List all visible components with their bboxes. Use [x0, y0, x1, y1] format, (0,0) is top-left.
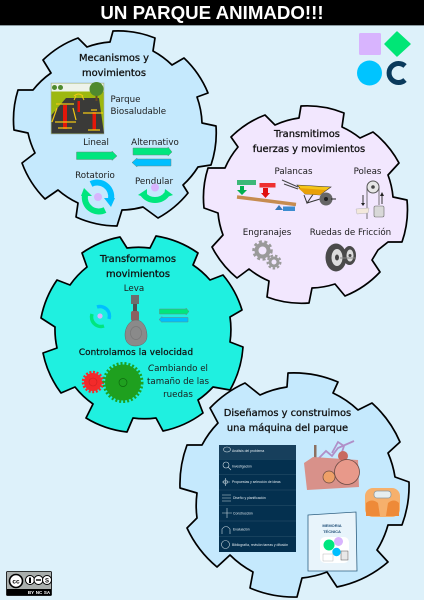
image: parque biosaludable [51, 82, 104, 134]
label: alternativo: Alternativo [131, 138, 179, 148]
text: cambiando el tamano: Cambiando el [148, 364, 208, 374]
panel: fases del proyecto [219, 445, 296, 552]
badge: creative commons: BY [28, 590, 34, 595]
badge: creative commons: cc [12, 578, 20, 586]
arrow: lineal [76, 151, 117, 160]
icon: guantes y gafas [365, 488, 400, 517]
icon: carretilla [282, 180, 336, 206]
arrow: izquierda [159, 316, 188, 322]
title [0, 0, 424, 26]
icon: leva [125, 295, 147, 346]
badge: creative commons [6, 572, 52, 596]
label: leva: Leva [124, 284, 144, 294]
heading: mecanismos: movimientos [82, 68, 146, 79]
label: parque biosaludable: Parque [110, 95, 140, 105]
badge: creative commons: SA [44, 590, 51, 595]
panel: fases del proyecto: Evaluación [233, 528, 250, 532]
logo: shapes [357, 32, 410, 86]
panel: fases del proyecto: Investigación [232, 464, 252, 468]
heading: transformamos: Transformamos [100, 254, 176, 265]
icon: engranaje verde [104, 364, 142, 402]
text: cambiando el tamano: tamaño de las [147, 377, 209, 387]
panel: memoria tecnica: TÉCNICA [323, 529, 341, 534]
label: ruedas de friccion: Ruedas de Fricción [310, 227, 391, 238]
heading: mecanismos: Mecanismos y [79, 53, 149, 64]
icon: pendular [138, 184, 173, 200]
panel: fases del proyecto: Construcción [233, 512, 253, 516]
heading: disenamos: una máquina del parque [227, 422, 348, 434]
icon: rotatorio pequeno [92, 307, 109, 326]
panel: fases del proyecto: Análisis del problema [232, 449, 264, 453]
icon: rotatorio [81, 183, 115, 211]
label: parque biosaludable: Biosaludable [110, 107, 166, 117]
panel: fases del proyecto: Diseño y planificación [233, 496, 266, 500]
arrow: alternativo derecha [133, 147, 172, 156]
badge: creative commons: NC [36, 590, 43, 595]
icon: ruedas de friccion [326, 244, 356, 272]
icon: polea [356, 181, 384, 219]
arrow: derecha [160, 308, 189, 315]
panel: memoria tecnica [308, 512, 357, 571]
icon: palanca [237, 180, 296, 211]
panel: mecanismos y movimientos [13, 31, 216, 226]
panel: transmitimos fuerzas y movimientos [203, 106, 407, 303]
label: lineal: Lineal [83, 138, 109, 148]
label: palancas: Palancas [274, 167, 313, 177]
panel: transformamos movimientos [41, 236, 243, 432]
panel: fases del proyecto: Bibliografía, revisión tareas y difusión [232, 543, 288, 547]
title: UN PARQUE ANIMADO!!! [100, 2, 324, 23]
label: pendular: Pendular [135, 177, 173, 187]
heading: transmitimos: fuerzas y movimientos [253, 144, 365, 155]
label: poleas: Poleas [354, 167, 382, 177]
image: maquina [304, 441, 360, 490]
icon: engranajes [254, 242, 280, 268]
panel: disenamos y construimos [180, 373, 409, 597]
label: engranajes: Engranajes [243, 228, 292, 238]
heading: controlamos la velocidad: Controlamos la velocidad [79, 348, 193, 358]
panel: memoria tecnica: MEMORIA [322, 523, 342, 528]
badge: creative commons: S [45, 578, 49, 584]
heading: disenamos: Diseñamos y construimos [224, 408, 351, 419]
heading: transformamos: movimientos [106, 269, 170, 280]
text: cambiando el tamano: ruedas [163, 390, 193, 400]
arrow: alternativo izquierda [132, 158, 171, 167]
heading: transmitimos: Transmitimos [274, 129, 340, 140]
panel: fases del proyecto: Propuestas y selección de ideas [232, 480, 281, 484]
icon: engranaje rojo [83, 372, 103, 392]
label: rotatorio: Rotatorio [75, 171, 115, 181]
